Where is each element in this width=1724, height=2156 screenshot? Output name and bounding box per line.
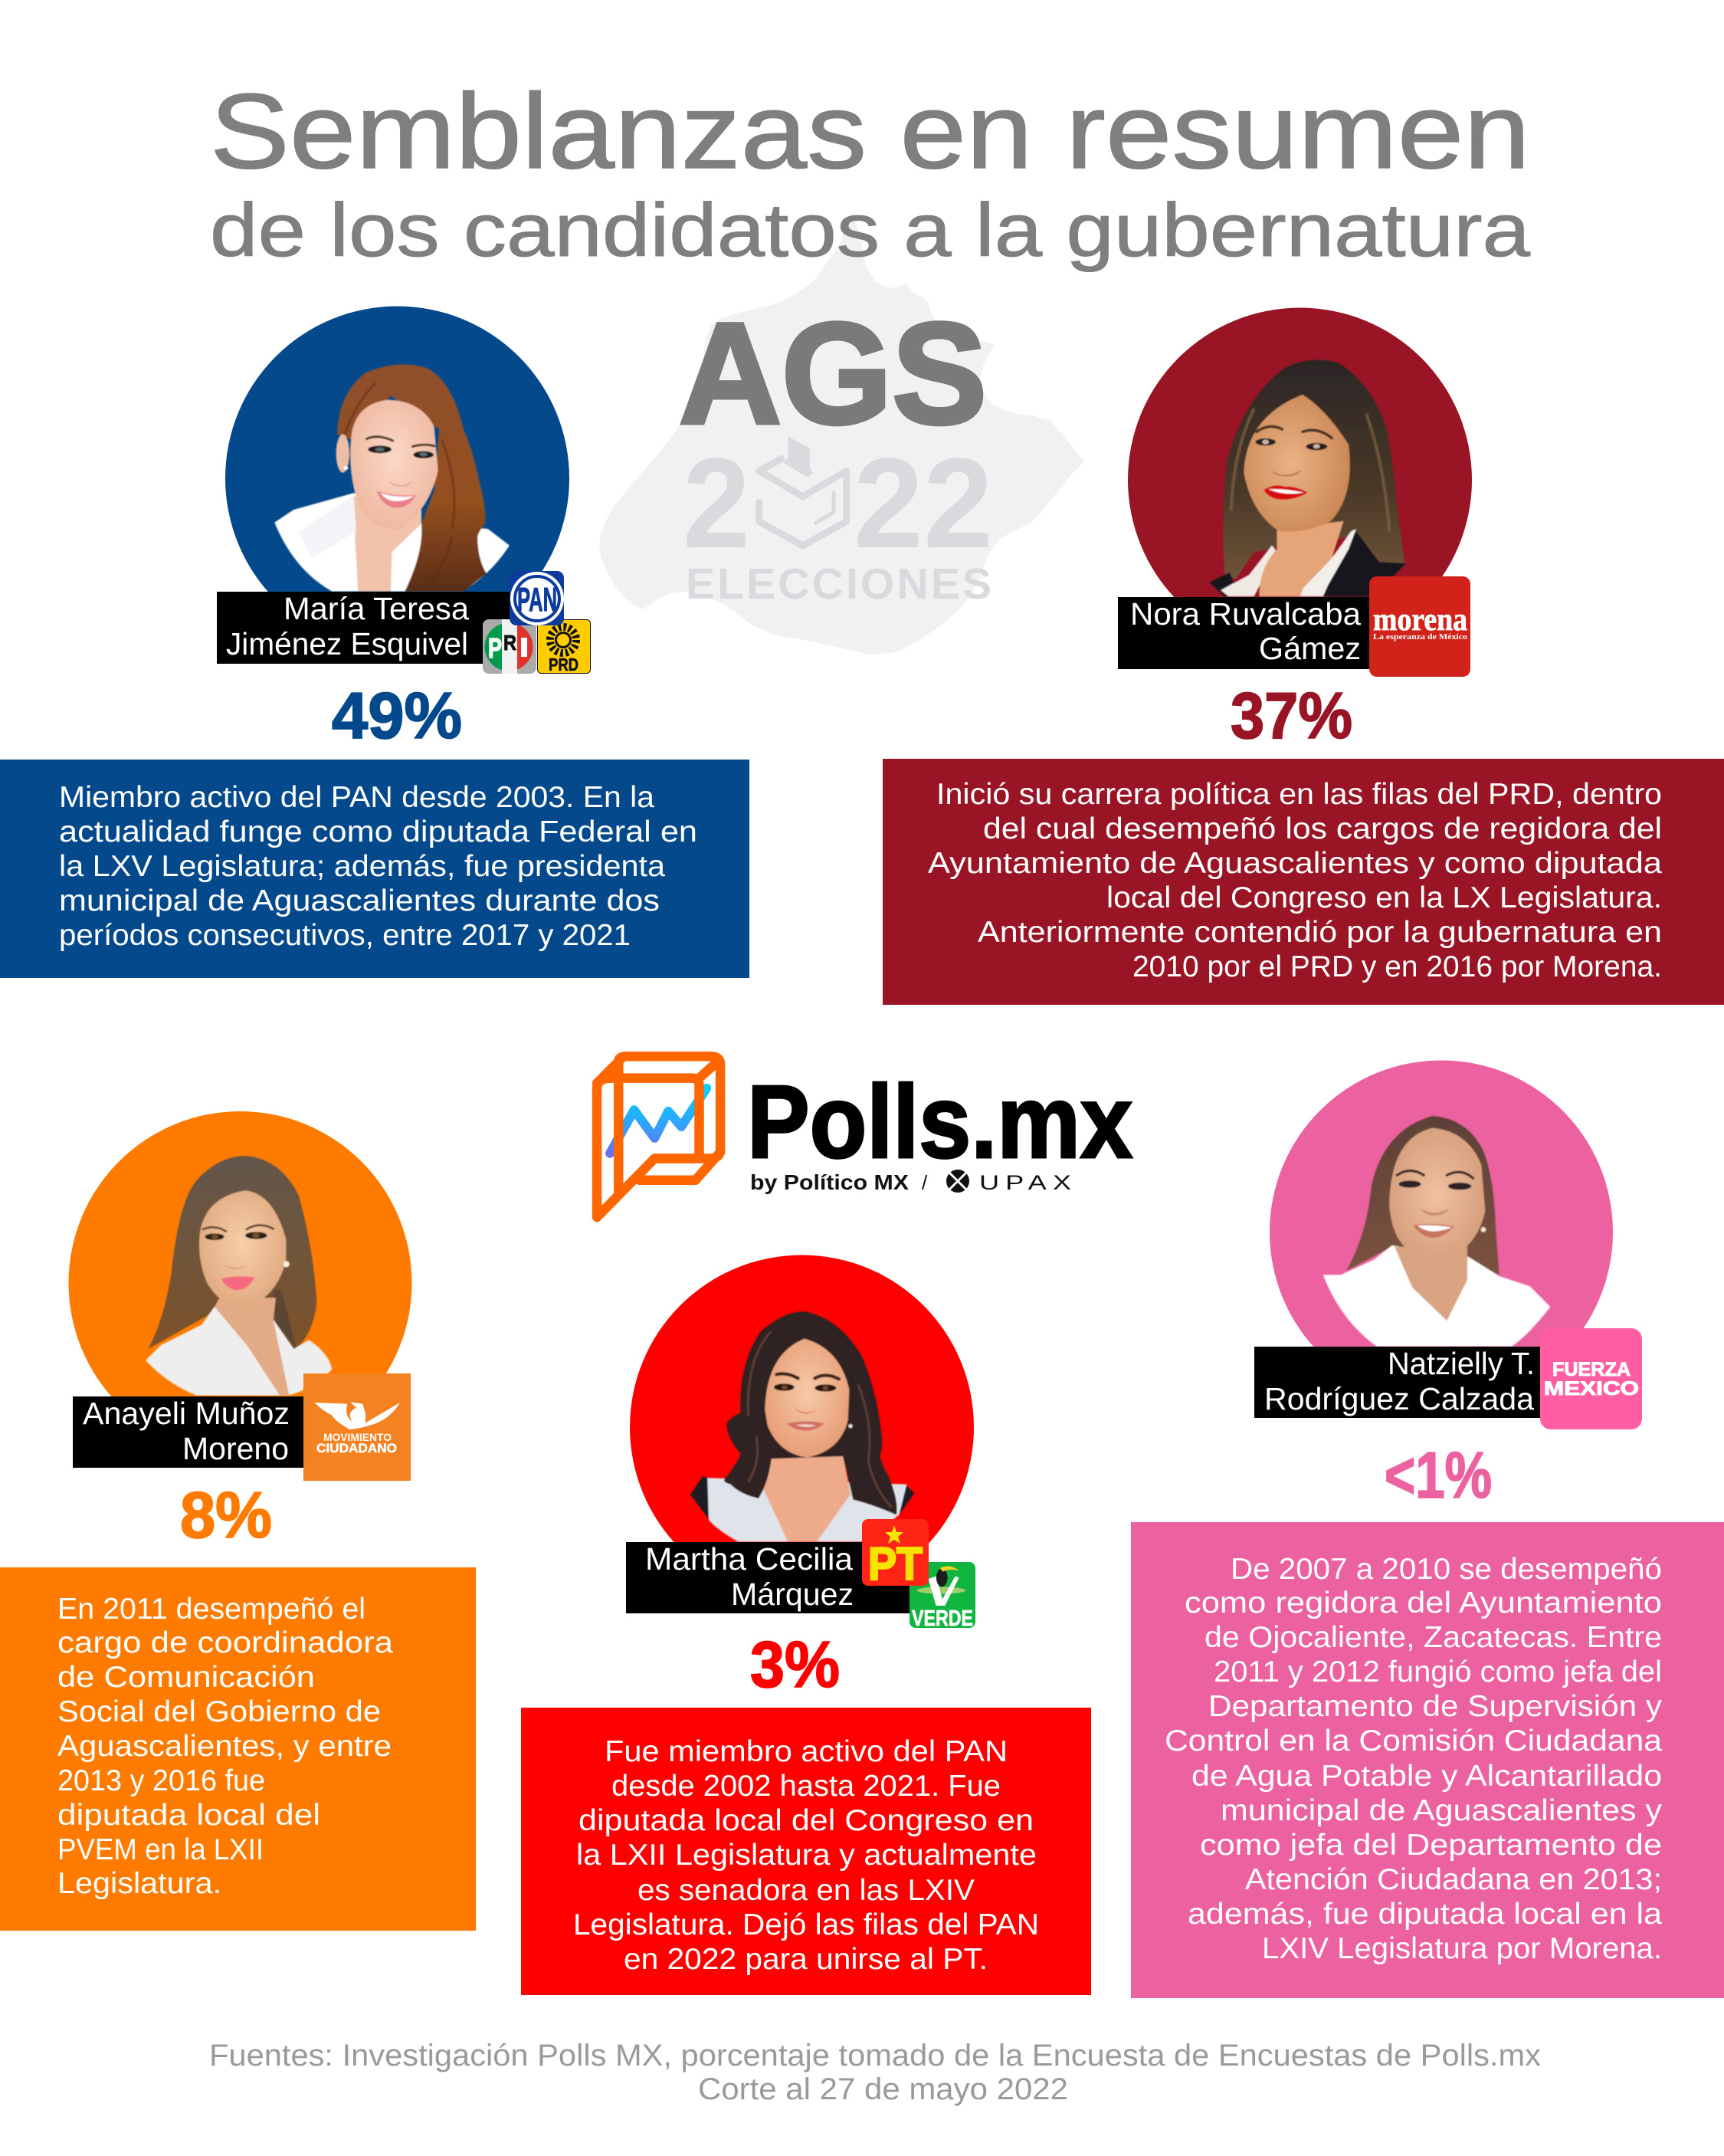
logo: morena [1369,576,1470,677]
logo: Partido Verde [910,1562,975,1631]
bio panel: Ayuntamiento de Aguascalientes y como diputada [928,847,1662,880]
bio panel: municipal de Aguascalientes durante dos [59,884,660,917]
logo: Movimiento Ciudadano: CIUDADANO [316,1441,397,1455]
sources footer: Fuentes: Investigación Polls MX, porcentaje tomado de la Encuesta de Encuestas de Polls.mx [209,2039,1541,2072]
icon: chart line [610,1088,706,1153]
name bar [626,1542,910,1613]
candidate 3: Anayeli Muñoz Moreno [0,1111,476,1931]
candidate 5: Natzielly T. Rodríguez Calzada [1131,1061,1724,1998]
name: María Teresa [284,591,469,626]
bio panel: actualidad funge como diputada Federal en [59,815,697,848]
logo: PAN: PAN [517,581,557,619]
icon: ballot box [759,436,847,546]
bio panel: del cual desempeñó los cargos de regidora del [983,812,1662,845]
title: Semblanzas en resumen [210,72,1530,191]
bio panel: períodos consecutivos, entre 2017 y 2021 [59,919,631,952]
bio panel: Miembro activo del PAN desde 2003. En la [59,781,654,814]
candidate 2: Nora Ruvalcaba Gámez [883,308,1724,1005]
name: Jiménez Esquivel [226,626,468,661]
bio panel: PVEM en la LXII [57,1833,264,1866]
bio panel: diputada local del [57,1799,320,1832]
percentage: <1% [1385,1439,1492,1512]
bio panel: Legislatura. Dejó las filas del PAN [573,1908,1039,1941]
portrait: Martha [690,1311,914,1542]
bio panel: es senadora en las LXIV [637,1874,975,1907]
name bar [217,592,510,664]
Polls.mx logo: / [922,1171,928,1194]
bio panel: local del Congreso en la LX Legislatura. [1106,881,1662,914]
portrait circle: pink [1270,1061,1613,1404]
bio panel: de Ojocaliente, Zacatecas. Entre [1205,1621,1662,1654]
Polls.mx logo: UPAX [979,1171,1077,1194]
percentage: 37% [1231,680,1352,753]
Polls.mx logo [597,1056,1132,1217]
name: Nora Ruvalcaba [1130,596,1361,632]
bio panel: como jefa del Departamento de [1200,1829,1662,1862]
logo: Movimiento Ciudadano [303,1373,411,1481]
portrait circle: blue [225,307,569,650]
bio panel [1131,1522,1724,1998]
bio panel: además, fue diputada local en la [1188,1898,1662,1931]
bio panel: 2011 y 2012 fungió como jefa del [1214,1656,1662,1688]
name bar [1254,1347,1540,1418]
percentage: 3% [750,1629,840,1702]
bio panel: cargo de coordinadora [57,1626,393,1659]
bio panel: diputada local del Congreso en [578,1804,1034,1837]
elections logo: AGS 2022: ELECCIONES [686,560,991,609]
percentage: 8% [180,1479,272,1552]
bio panel [883,759,1724,1005]
logo: PRI [483,619,536,674]
portrait: Nora [1209,360,1406,596]
name: Martha Cecilia [645,1541,853,1577]
candidate 1: María Teresa Jiménez Esquivel [0,307,749,978]
logo: Fuerza México: FUERZA [1552,1359,1631,1380]
name [645,1541,854,1612]
bio panel: desde 2002 hasta 2021. Fue [611,1770,1001,1803]
logo: morena: morena [1373,602,1467,638]
logo: PAN [510,571,564,625]
elections logo: AGS 2022: 2 [683,432,750,575]
name: Márquez [731,1577,854,1612]
portrait: María Teresa [274,364,510,592]
bio panel: como regidora del Ayuntamiento [1185,1587,1662,1619]
title [210,72,1531,272]
bio panel: 2013 y 2016 fue [57,1764,265,1797]
percentage: 49% [332,680,462,753]
name [1264,1346,1535,1416]
bio panel: municipal de Aguascalientes y [1221,1794,1663,1827]
bio panel: De 2007 a 2010 se desempeñó [1231,1553,1662,1586]
logo: Fuerza México: MEXICO [1544,1378,1639,1400]
wordmark: Polls.mx [747,1064,1132,1180]
portrait circle: red [630,1255,974,1599]
logo: PRD: PRD [549,655,578,674]
logo: PRD [538,619,590,674]
elections logo: AGS 2022: AGS [679,293,987,454]
bio panel [521,1708,1091,1995]
bio panel: Inició su carrera política en las filas del PRD, dentro [936,778,1662,811]
portrait circle: orange [69,1111,412,1455]
bio panel: 2010 por el PRD y en 2016 por Morena. [1132,950,1662,983]
name [83,1396,290,1466]
portrait circle: dark red [1128,308,1472,651]
name: Moreno [182,1431,289,1466]
bio panel: LXIV Legislatura por Morena. [1262,1932,1662,1965]
bio panel: Legislatura. [57,1867,221,1900]
name [1130,596,1361,666]
subtitle: de los candidatos a la gubernatura [210,188,1531,272]
bio panel: Departamento de Supervisión y [1208,1690,1663,1723]
sources footer: Corte al 27 de mayo 2022 [698,2072,1068,2106]
bio panel: Fue miembro activo del PAN [605,1735,1008,1768]
bio panel: de Agua Potable y Alcantarillado [1191,1760,1662,1793]
icon: UPAX [946,1170,969,1193]
bio panel: Control en la Comisión Ciudadana [1165,1724,1662,1757]
icon: orange speech box [597,1056,720,1217]
bio panel [0,1567,476,1931]
candidate 4: Martha Cecilia Márquez [521,1255,1091,1995]
logo: PT [862,1519,929,1590]
logo: Partido Verde: VERDE [912,1606,973,1631]
bio panel: de Comunicación [57,1661,315,1694]
name [226,591,469,661]
logo: Fuerza México [1540,1328,1642,1429]
name bar [73,1396,303,1468]
map of Aguascalientes [599,212,1084,655]
name: Anayeli Muñoz [83,1396,290,1431]
bio panel: En 2011 desempeñó el [57,1593,365,1626]
logo: PRI: R [503,631,516,655]
logo: PRI: P [488,632,502,664]
tagline: by Político MX [750,1170,909,1194]
bio panel: la LXII Legislatura y actualmente [576,1839,1037,1872]
bio panel: Aguascalientes, y entre [57,1730,392,1763]
bio panel [0,760,749,978]
bio panel: la LXV Legislatura; además, fue presidenta [59,850,665,883]
elections logo: AGS 2022 [679,293,993,609]
portrait: Natzielly [1323,1116,1550,1347]
bio panel: Atención Ciudadana en 2013; [1245,1863,1662,1896]
name: Gámez [1259,631,1361,666]
bio panel: Anteriormente contendió por la gubernatura en [978,916,1662,949]
bio panel: en 2022 para unirse al PT. [624,1943,988,1976]
name: Rodríguez Calzada [1264,1381,1534,1416]
logo: PT: PT [868,1538,923,1590]
logo: Movimiento Ciudadano: MOVIMIENTO [323,1431,392,1443]
name: Natzielly T. [1388,1346,1535,1381]
name bar [1118,597,1369,669]
elections logo: AGS 2022: 22 [854,432,993,575]
bio panel: Social del Gobierno de [57,1695,381,1728]
logo: morena: La esperanza de México [1373,632,1468,642]
portrait: Anayeli [146,1156,332,1396]
sources footer [209,2039,1541,2106]
